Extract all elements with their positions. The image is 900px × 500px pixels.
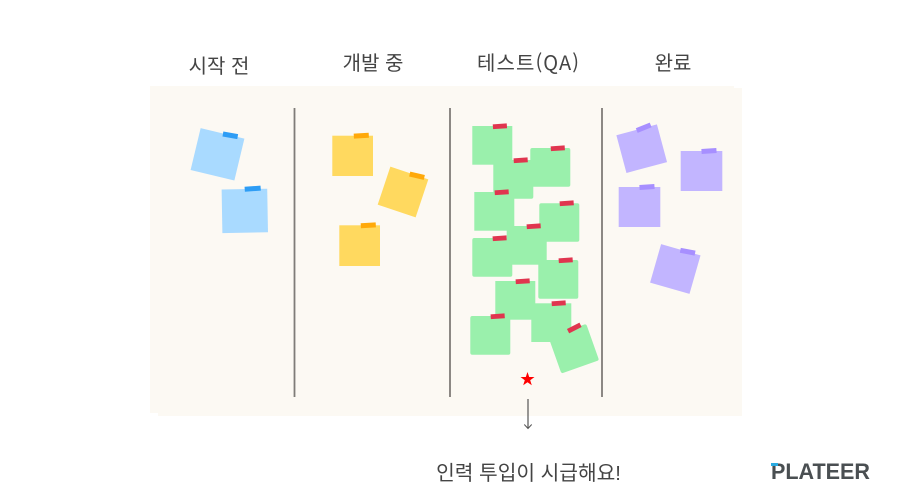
column dividers <box>294 108 602 397</box>
column: in development notes <box>332 133 428 266</box>
callout text: 인력 투입이 시급해요! <box>436 462 621 485</box>
sticky note: yellow 1 <box>332 133 373 176</box>
column: done notes <box>616 123 722 294</box>
sticky note: blue 2 <box>222 186 268 233</box>
logo: Plateer: PLATEER <box>771 459 870 484</box>
panel: kanban board <box>150 86 742 416</box>
arrow: star to callout <box>524 399 532 428</box>
sticky note: green 6 <box>507 223 547 265</box>
heading: in development: 개발 중 <box>343 52 403 75</box>
sticky note: green 9 <box>495 278 535 320</box>
icon: red star <box>520 372 534 385</box>
sticky note: green 10 <box>531 300 571 342</box>
sticky note: blue 1 <box>191 128 244 180</box>
sticky note: green 12 rotated <box>549 323 599 374</box>
sticky note: green 4 <box>474 189 514 231</box>
column: before start notes <box>191 128 268 233</box>
sticky note: green 3 <box>530 145 570 187</box>
sticky note: green 1 <box>472 123 512 165</box>
sticky note: purple 1 <box>616 123 667 173</box>
column: testing notes <box>470 123 599 374</box>
sticky note: green 11 <box>470 313 510 355</box>
sticky note: green 7 <box>472 235 512 277</box>
sticky note: purple 4 <box>650 244 701 294</box>
sticky note: green 8 <box>538 257 578 299</box>
heading: before start: 시작 전 <box>189 55 249 78</box>
heading: testing QA: 테스트(QA) <box>477 47 579 76</box>
sticky note: yellow 3 <box>339 222 380 266</box>
sticky note: yellow 2 <box>378 167 428 217</box>
sticky note: purple 3 <box>619 184 660 227</box>
sticky note: purple 2 <box>681 148 722 191</box>
sticky note: green 2 <box>493 157 533 199</box>
sticky note: green 5 <box>539 200 579 242</box>
heading: done: 완료 <box>655 52 691 75</box>
